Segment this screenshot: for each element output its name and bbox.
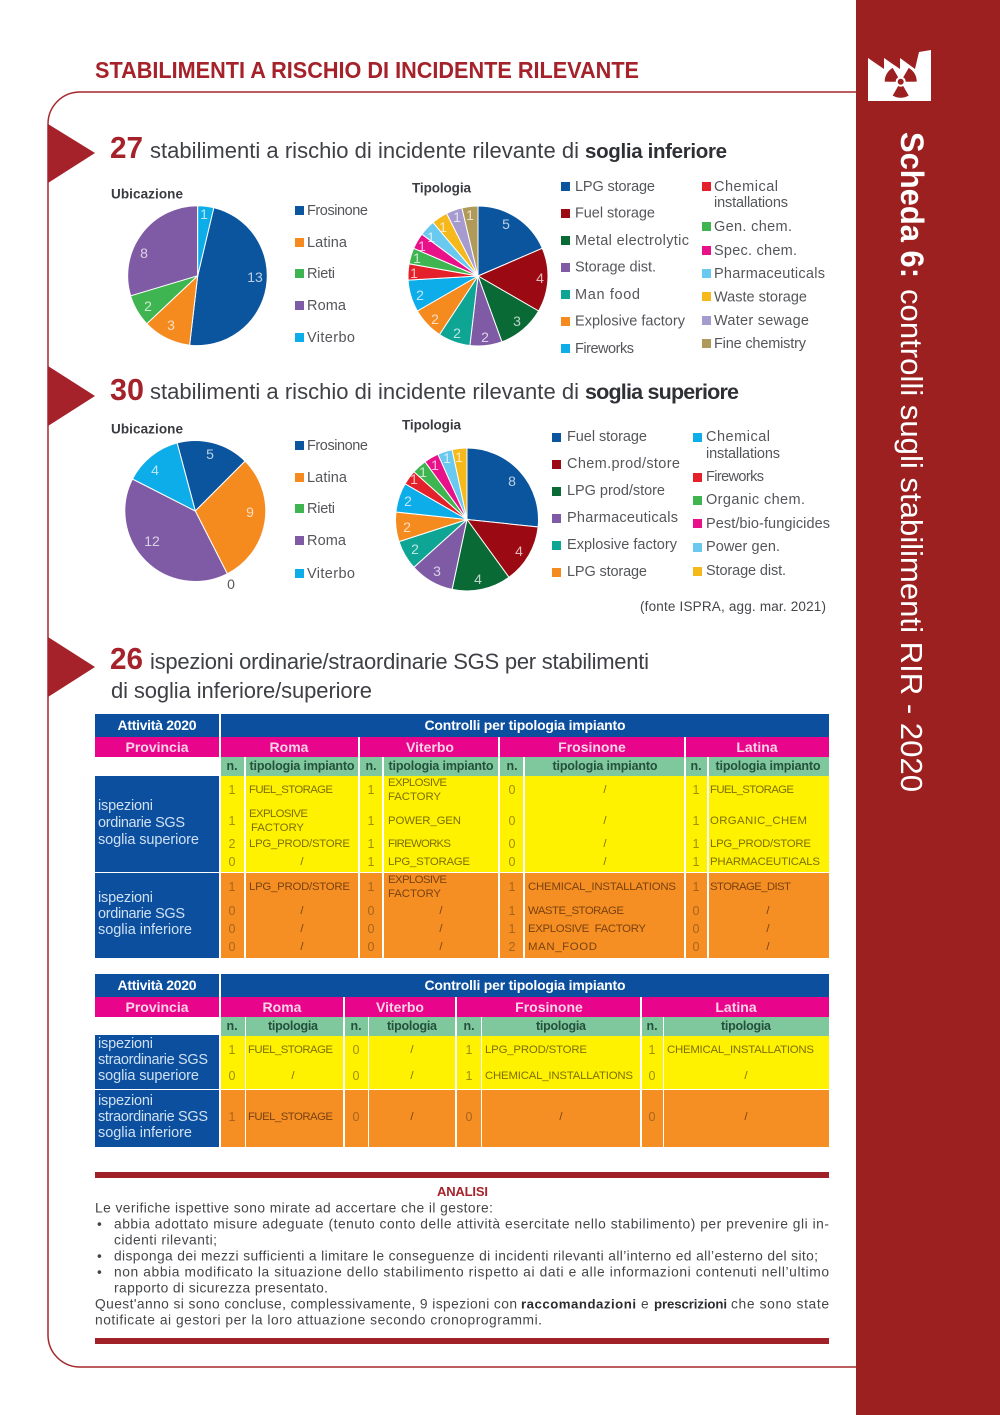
table header rows: Frosinone (558, 739, 626, 755)
row: straordinarie superiore: / (291, 1070, 295, 1082)
legend: ubicazione 1: Latina (307, 235, 348, 251)
row: straordinarie inferiore: straordinarie SGS (98, 1109, 208, 1125)
row: soglia superiore: 0 (509, 855, 516, 869)
pie labels: tipologia soglia superiore: 4 (474, 571, 482, 587)
row: straordinarie inferiore (95, 1090, 829, 1147)
legend: tipologia 2, first column: LPG storage (567, 564, 647, 580)
legend: ubicazione 1 (295, 203, 368, 346)
row: soglia inferiore: EXPLOSIVE FACTORY (528, 923, 646, 935)
pie labels: ubicazione soglia inferiore: 8 (140, 245, 148, 261)
row: soglia superiore: FACTORY (251, 822, 304, 834)
row: soglia superiore: 1 (368, 855, 375, 869)
row: straordinarie inferiore: 0 (649, 1110, 656, 1124)
row: soglia inferiore: 0 (693, 904, 700, 918)
pie chart: ubicazione soglia inferiore (128, 206, 267, 346)
pie labels: tipologia soglia inferiore: 3 (513, 313, 521, 329)
legend: ubicazione 1: Roma (307, 298, 347, 314)
legend: tipologia 2, first column: Fuel storage (567, 429, 647, 445)
row: soglia inferiore: 1 (368, 880, 375, 894)
row: straordinarie superiore: CHEMICAL_INSTALLATIONS (667, 1044, 814, 1056)
pie labels: tipologia soglia superiore: 2 (404, 493, 412, 509)
analysis text: notificate ai gestori per la loro attuazione secondo cronoprogrammi. (95, 1312, 542, 1328)
pie labels: tipologia soglia inferiore: 1 (427, 229, 435, 245)
row: soglia inferiore: 1 (693, 880, 700, 894)
row: soglia superiore: 1 (229, 783, 236, 797)
pie labels: tipologia soglia inferiore: 1 (418, 238, 426, 254)
row: soglia inferiore: / (300, 923, 304, 935)
legend: tipologia 2, second column: Organic chem. (706, 492, 805, 508)
row: soglia inferiore: / (439, 941, 443, 953)
row: soglia superiore: LPG_PROD/STORE (710, 838, 811, 850)
pie labels: ubicazione soglia superiore: 4 (151, 462, 159, 478)
row: straordinarie superiore: 1 (649, 1043, 656, 1057)
row: soglia superiore: ordinarie SGS (98, 815, 185, 831)
row: soglia inferiore: 2 (509, 940, 516, 954)
pie labels: tipologia soglia inferiore: 4 (536, 270, 544, 286)
sidebar (856, 0, 1000, 1415)
pie labels: tipologia soglia inferiore: 1 (453, 209, 461, 225)
icon: factory with radiation symbol (868, 50, 931, 101)
legend: tipologia 1, second column: Water sewage (714, 313, 809, 329)
heading: soglia superiore: 30 (110, 372, 144, 407)
arrow: section 2 (48, 366, 95, 426)
title: STABILIMENTI A RISCHIO DI INCIDENTE RILEVANTE (95, 57, 639, 83)
row: soglia superiore: FUEL_STORAGE (710, 784, 794, 796)
legend: ubicazione 2: Latina (307, 470, 348, 486)
analysis text: Quest'anno si sono concluse, complessivamente, 9 ispezioni con (95, 1296, 517, 1312)
analysis text: rapporto di sicurezza presentato. (114, 1280, 328, 1296)
table header rows (95, 974, 829, 1036)
table header rows: Roma (263, 999, 302, 1015)
row: straordinarie inferiore: 0 (466, 1110, 473, 1124)
row: soglia superiore: FACTORY (388, 791, 441, 803)
table header rows: n. (690, 759, 702, 773)
sidebar title: controlli sugli stabilimenti RIR - 2020 (894, 289, 929, 792)
pie labels: tipologia soglia superiore: 8 (508, 473, 516, 489)
row: soglia inferiore: 1 (509, 922, 516, 936)
analysis text: prescrizioni (654, 1296, 727, 1312)
table header rows: Roma (270, 739, 309, 755)
legend: tipologia 2, first column: LPG prod/store (567, 483, 665, 499)
heading: ispezioni: 26 (110, 641, 143, 676)
table header rows: n. (226, 1019, 238, 1033)
table header rows: n. (506, 759, 518, 773)
table header rows: tipologia (387, 1019, 438, 1033)
pie chart: ubicazione soglia superiore (125, 441, 266, 581)
row: soglia inferiore: / (766, 905, 770, 917)
legend: tipologia 2, second column: Storage dist. (706, 563, 786, 579)
table header rows: Latina (715, 999, 757, 1015)
row: soglia inferiore: WASTE_STORAGE (528, 905, 624, 917)
legend: tipologia 1, second column: Pharmaceuticals (714, 266, 825, 282)
table header rows: Controlli per tipologia impianto (424, 977, 626, 993)
legend: tipologia 2, second column: Power gen. (706, 539, 780, 555)
heading: ispezioni: ispezioni ordinarie/straordinarie SGS per stabilimenti (150, 649, 649, 674)
table header rows: Frosinone (515, 999, 583, 1015)
legend: tipologia 2, first column: Explosive factory (567, 537, 678, 553)
heading: soglia superiore (110, 372, 739, 407)
pie labels: ubicazione soglia superiore: 5 (206, 446, 214, 462)
row: straordinarie superiore: 0 (229, 1069, 236, 1083)
table: ispezioni ordinarie (95, 714, 829, 958)
pie labels: tipologia soglia inferiore: 1 (439, 219, 447, 235)
row: soglia superiore: 1 (693, 783, 700, 797)
row: soglia inferiore: ordinarie SGS (98, 906, 185, 922)
row: soglia superiore: ispezioni (98, 798, 153, 814)
legend: tipologia 1, second column: installations (714, 195, 788, 211)
legend: ubicazione 2: Viterbo (307, 566, 355, 582)
row: soglia inferiore: ispezioni (98, 890, 153, 906)
row: soglia superiore: ORGANIC_CHEM (710, 815, 807, 827)
heading: soglia superiore: soglia superiore (585, 380, 739, 404)
pie labels: tipologia soglia superiore: 2 (411, 541, 419, 557)
row: soglia inferiore: STORAGE_DIST (710, 881, 791, 893)
row: soglia inferiore: / (300, 941, 304, 953)
row: soglia inferiore: / (300, 905, 304, 917)
pie labels: tipologia soglia inferiore: 5 (502, 216, 510, 232)
table header rows: Viterbo (376, 999, 424, 1015)
pie labels: tipologia soglia superiore: 1 (419, 464, 427, 480)
row: soglia superiore: 1 (693, 855, 700, 869)
pie labels: tipologia soglia inferiore (410, 207, 544, 345)
row: soglia inferiore: 0 (693, 922, 700, 936)
row: straordinarie superiore (95, 1035, 829, 1089)
row: soglia inferiore: / (766, 941, 770, 953)
legend: tipologia 1, second column: Chemical (714, 179, 778, 195)
legend: tipologia 2, first column (552, 429, 680, 580)
row: soglia superiore: 1 (693, 837, 700, 851)
row: soglia superiore: / (603, 856, 607, 868)
heading: soglia inferiore: stabilimenti a rischio di incidente rilevante di (150, 138, 579, 163)
row: soglia inferiore: 0 (368, 904, 375, 918)
table header rows: tipologia (721, 1019, 772, 1033)
row: soglia inferiore: 1 (509, 904, 516, 918)
pie labels: tipologia soglia inferiore: 2 (431, 311, 439, 327)
legend: ubicazione 2: Rieti (307, 501, 335, 517)
pie labels: tipologia soglia superiore: 2 (403, 519, 411, 535)
row: straordinarie inferiore: / (559, 1111, 563, 1123)
legend: tipologia 1, second column (702, 179, 825, 352)
analysis text: e (641, 1296, 649, 1312)
analysis text (95, 1200, 829, 1328)
analysis text: abbia adottato misure adeguate (tenuto conto delle attività esercitate nello stabilimento) per prevenire gli in- (114, 1216, 829, 1232)
legend: tipologia 2, second column: Fireworks (706, 469, 764, 485)
pie labels: ubicazione soglia superiore (144, 446, 254, 549)
pie labels: tipologia soglia inferiore: 1 (410, 265, 418, 281)
row: soglia superiore: EXPLOSIVE (388, 777, 447, 789)
label: tipologia 1: Tipologia (412, 180, 471, 196)
legend: tipologia 1, second column: Gen. chem. (714, 219, 792, 235)
row: soglia superiore: POWER_GEN (388, 815, 461, 827)
row: soglia superiore: / (300, 856, 304, 868)
row: straordinarie superiore: ispezioni (98, 1036, 153, 1052)
row: straordinarie inferiore: soglia inferiore (98, 1125, 192, 1141)
pie labels: ubicazione soglia inferiore: 3 (167, 317, 175, 333)
row: soglia superiore: 1 (368, 814, 375, 828)
row: soglia inferiore: FACTORY (388, 888, 441, 900)
table header rows: tipologia (536, 1019, 587, 1033)
pie labels: tipologia soglia inferiore: 1 (413, 250, 421, 266)
row: straordinarie superiore: straordinarie SGS (98, 1052, 208, 1068)
legend: ubicazione 2: Frosinone (307, 438, 368, 454)
table header rows (95, 714, 829, 776)
pie labels: tipologia soglia superiore: 1 (431, 457, 439, 473)
row: soglia superiore: EXPLOSIVE (249, 808, 308, 820)
legend: tipologia 2, first column: Pharmaceuticals (567, 510, 678, 526)
analysis text: raccomandazioni (521, 1296, 636, 1312)
label: ubicazione 1: Ubicazione (111, 186, 183, 202)
row: straordinarie superiore: LPG_PROD/STORE (485, 1044, 587, 1056)
source note: (fonte ISPRA, agg. mar. 2021) (640, 599, 826, 614)
row: straordinarie superiore: / (410, 1070, 414, 1082)
legend: tipologia 1, first column: Metal electrolytic (575, 233, 689, 249)
row: soglia superiore: FIREWORKS (388, 838, 451, 850)
row: soglia inferiore: CHEMICAL_INSTALLATIONS (528, 881, 676, 893)
table header rows: Attività 2020 (118, 717, 197, 733)
analysis box (95, 1172, 829, 1344)
row: straordinarie superiore: 0 (353, 1043, 360, 1057)
analysis text: disponga dei mezzi sufficienti a limitare le conseguenze di incidenti rilevanti all’interno ed all’esterno del sito; (114, 1248, 818, 1264)
pie labels: ubicazione soglia superiore: 9 (246, 504, 254, 520)
legend: tipologia 1, first column: LPG storage (575, 179, 655, 195)
legend: tipologia 2, second column (693, 429, 830, 579)
legend: tipologia 2, second column: installations (706, 446, 780, 462)
heading: soglia inferiore: soglia inferiore (585, 140, 727, 163)
legend: tipologia 2, second column: Chemical (706, 429, 770, 445)
heading: ispezioni (110, 641, 649, 703)
table header rows: Attività 2020 (118, 977, 197, 993)
row: soglia inferiore: 0 (693, 940, 700, 954)
pie chart: tipologia soglia superiore (396, 448, 538, 591)
legend: ubicazione 1: Frosinone (307, 203, 368, 219)
legend: ubicazione 2: Roma (307, 533, 347, 549)
row: soglia superiore: / (603, 784, 607, 796)
heading: soglia inferiore: 27 (110, 130, 143, 165)
legend: ubicazione 1: Rieti (307, 266, 335, 282)
table header rows: n. (350, 1019, 362, 1033)
row: straordinarie superiore: 1 (229, 1043, 236, 1057)
sidebar title: Scheda 6: (894, 132, 930, 278)
heading: soglia superiore: stabilimenti a rischio di incidente rilevante di (150, 379, 579, 404)
legend: ubicazione 1: Viterbo (307, 330, 355, 346)
legend: tipologia 1, first column: Storage dist. (575, 260, 656, 276)
arrow: section 3 (48, 637, 95, 697)
analysis text: cidenti rilevanti; (114, 1232, 217, 1248)
row: soglia inferiore: soglia inferiore (98, 922, 192, 938)
row: straordinarie superiore: / (744, 1070, 748, 1082)
table header rows: tipologia impianto (250, 759, 355, 773)
heading: ispezioni: di soglia inferiore/superiore (111, 678, 372, 703)
row: soglia inferiore: 0 (368, 922, 375, 936)
row: straordinarie superiore: 0 (649, 1069, 656, 1083)
row: soglia inferiore: / (766, 923, 770, 935)
row: straordinarie inferiore: FUEL_STORAGE (248, 1111, 333, 1123)
row: soglia superiore: soglia superiore (98, 832, 199, 848)
legend: tipologia 1, first column: Fuel storage (575, 206, 655, 222)
row: soglia inferiore: 1 (509, 880, 516, 894)
row: soglia inferiore: EXPLOSIVE (388, 874, 447, 886)
row: straordinarie inferiore: 0 (353, 1110, 360, 1124)
pie labels: tipologia soglia superiore (403, 449, 523, 587)
legend: tipologia 1, first column: Fireworks (575, 341, 634, 357)
row: soglia inferiore: LPG_PROD/STORE (249, 881, 350, 893)
analysis heading: ANALISI (437, 1184, 488, 1199)
legend: tipologia 1, first column: Explosive factory (575, 314, 686, 330)
analysis text: che sono state (731, 1296, 829, 1312)
pie labels: ubicazione soglia inferiore: 1 (200, 206, 208, 222)
table header rows: tipologia impianto (388, 759, 494, 773)
analysis text: • (97, 1264, 102, 1280)
row: soglia superiore: 1 (368, 837, 375, 851)
legend: tipologia 2, second column: Pest/bio-fungicides (706, 516, 830, 532)
table header rows: n. (646, 1019, 658, 1033)
analysis text: • (97, 1248, 102, 1264)
pie labels: tipologia soglia inferiore: 2 (453, 325, 461, 341)
pie labels: tipologia soglia inferiore: 1 (466, 207, 474, 223)
table header rows: Viterbo (406, 739, 454, 755)
arrow: section 1 (48, 124, 95, 183)
row: soglia inferiore: 0 (229, 922, 236, 936)
row: soglia superiore: 1 (229, 814, 236, 828)
pie labels: tipologia soglia inferiore: 2 (481, 329, 489, 345)
table header rows: tipologia impianto (552, 759, 658, 773)
row: straordinarie inferiore: / (744, 1111, 748, 1123)
table header rows: Latina (736, 739, 778, 755)
row: straordinarie inferiore: / (410, 1111, 414, 1123)
table header rows: Provincia (125, 999, 189, 1015)
legend: tipologia 1, second column: Waste storage (714, 290, 807, 306)
row: soglia superiore: 0 (509, 783, 516, 797)
table header rows: Provincia (125, 739, 189, 755)
pie labels: tipologia soglia inferiore: 2 (416, 287, 424, 303)
heading: soglia inferiore (110, 130, 727, 165)
pie labels: tipologia soglia superiore: 1 (410, 471, 418, 487)
row: soglia inferiore: / (439, 923, 443, 935)
row: straordinarie superiore: 1 (466, 1043, 473, 1057)
label: ubicazione 2: Ubicazione (111, 422, 183, 436)
table header rows: tipologia (268, 1019, 319, 1033)
row: soglia superiore: LPG_PROD/STORE (249, 838, 350, 850)
row: straordinarie superiore: FUEL_STORAGE (248, 1044, 333, 1056)
table header rows: n. (226, 759, 238, 773)
row: soglia superiore: FUEL_STORAGE (249, 784, 333, 796)
legend: tipologia 1, first column: Man food (575, 287, 640, 303)
pie zero label: 0 (227, 576, 235, 592)
row: straordinarie superiore: soglia superiore (98, 1068, 199, 1084)
legend: ubicazione 2 (295, 438, 368, 582)
panel outline (48, 92, 856, 1367)
table header rows: Controlli per tipologia impianto (424, 717, 626, 733)
row: straordinarie inferiore: ispezioni (98, 1093, 153, 1109)
row: soglia superiore: 0 (509, 814, 516, 828)
table header rows: tipologia impianto (716, 759, 821, 773)
analysis text: Le verifiche ispettive sono mirate ad accertare che il gestore: (95, 1200, 493, 1216)
pie labels: ubicazione soglia inferiore: 13 (247, 269, 263, 285)
row: straordinarie superiore: CHEMICAL_INSTALLATIONS (485, 1070, 633, 1082)
legend: tipologia 1, second column: Fine chemistry (714, 336, 807, 352)
pie chart: tipologia soglia inferiore (408, 206, 548, 346)
row: soglia inferiore: 0 (368, 940, 375, 954)
pie labels: tipologia soglia superiore: 1 (455, 449, 463, 465)
row: soglia inferiore: 1 (229, 880, 236, 894)
table: ispezioni straordinarie (95, 974, 829, 1147)
analysis text: • (97, 1216, 102, 1232)
pie labels: ubicazione soglia inferiore: 2 (144, 298, 152, 314)
row: straordinarie superiore: 0 (353, 1069, 360, 1083)
label: tipologia 2: Tipologia (402, 418, 461, 432)
row: soglia inferiore (95, 873, 829, 958)
pie labels: tipologia soglia superiore: 3 (433, 563, 441, 579)
row: soglia superiore: 0 (509, 837, 516, 851)
row: soglia inferiore: 0 (229, 940, 236, 954)
row: soglia inferiore: 0 (229, 904, 236, 918)
row: soglia superiore: 1 (693, 814, 700, 828)
table header rows: n. (463, 1019, 475, 1033)
row: soglia inferiore: / (439, 905, 443, 917)
row: soglia inferiore: MAN_FOOD (528, 941, 597, 953)
legend: tipologia 1, first column (561, 179, 689, 357)
row: straordinarie superiore: 1 (466, 1069, 473, 1083)
legend: tipologia 2, first column: Chem.prod/store (567, 456, 680, 472)
row: soglia superiore: 0 (229, 855, 236, 869)
pie labels: tipologia soglia superiore: 1 (443, 450, 451, 466)
row: straordinarie inferiore: 1 (229, 1110, 236, 1124)
row: soglia superiore: LPG_STORAGE (388, 856, 470, 868)
pie labels: ubicazione soglia superiore: 12 (144, 533, 160, 549)
row: soglia superiore: / (603, 838, 607, 850)
analysis text: non abbia modificato la situazione dello stabilimento rispetto ai dati e alle informazioni contenuti nell’ultimo (114, 1264, 829, 1280)
table header rows: n. (365, 759, 377, 773)
row: soglia superiore: / (603, 815, 607, 827)
pie labels: tipologia soglia superiore: 4 (515, 543, 523, 559)
row: soglia superiore: 2 (229, 837, 236, 851)
row: soglia superiore (95, 776, 829, 872)
pie labels: ubicazione soglia inferiore (140, 206, 263, 333)
legend: tipologia 1, second column: Spec. chem. (714, 243, 797, 259)
row: soglia superiore: PHARMACEUTICALS (710, 856, 820, 868)
row: straordinarie superiore: / (410, 1044, 414, 1056)
row: soglia superiore: 1 (368, 783, 375, 797)
